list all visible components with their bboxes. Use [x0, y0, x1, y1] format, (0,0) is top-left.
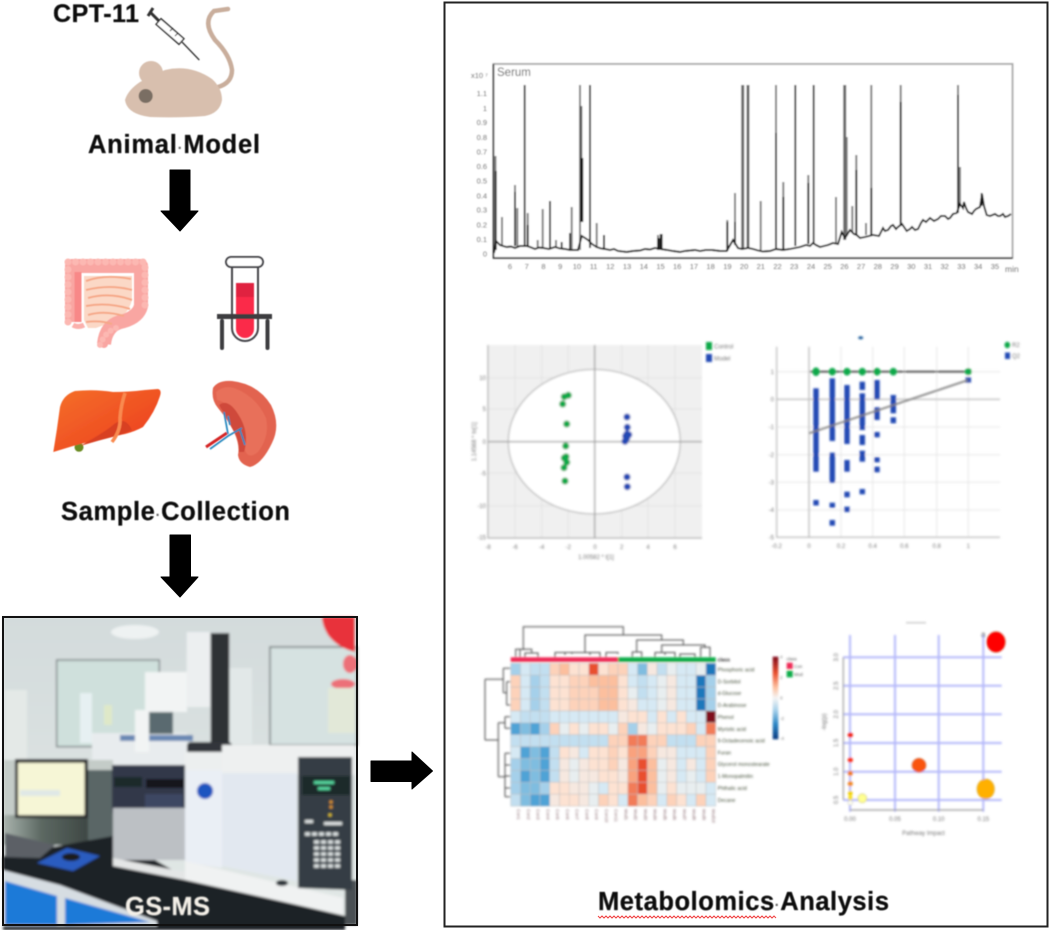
heatmap column labels: Mod3 [643, 809, 648, 821]
chart: pathway bubble plot: 2.0 [834, 709, 840, 718]
chart: permutation test: -1 [769, 425, 775, 431]
chart: serum chromatogram: 15 [656, 262, 665, 271]
chart: PCA score plot: -5 [481, 472, 487, 478]
chart: serum chromatogram: Serum [497, 67, 531, 79]
heatmap row labels: d-Glucose [718, 691, 741, 697]
chart: serum chromatogram: 20 [740, 262, 748, 271]
heatmap row labels: Furan [718, 750, 731, 756]
heatmap row labels: Glycerol monostearate [718, 762, 770, 768]
icon: liver [53, 389, 161, 452]
heatmap column labels: Con8 [584, 809, 589, 820]
heatmap column labels: Mod9 [701, 809, 706, 821]
chart: serum chromatogram: 0.8 [477, 133, 487, 142]
chart: serum chromatogram: 27 [857, 262, 865, 271]
chart: permutation test: Q2 [1012, 354, 1021, 360]
chart: serum chromatogram: 0 [483, 250, 487, 258]
chart: pathway bubble plot: 3.0 [834, 652, 840, 661]
chart: permutation test: -5 [769, 536, 775, 542]
label: CPT-11: CPT-11 [53, 0, 139, 28]
chart: serum chromatogram [471, 64, 1019, 274]
heatmap column labels: Con6 [565, 809, 570, 820]
chart: permutation test: 0 [807, 544, 811, 550]
chart: serum chromatogram: 29 [890, 262, 899, 271]
chart: PCA score plot: -2 [566, 545, 572, 551]
chart: serum chromatogram: 0.4 [477, 192, 487, 200]
heatmap colour scale: 4 [780, 654, 783, 660]
chart: serum chromatogram: 12 [606, 262, 614, 271]
photo frame [3, 617, 357, 925]
chart: permutation test: -4 [769, 508, 775, 514]
chart: PCA score plot: 0 [483, 440, 487, 446]
chart: serum chromatogram: 21 [757, 262, 765, 271]
heading: Metabolomics Analysis: Metabolomics·Analysis [598, 888, 889, 916]
chart: serum chromatogram: 11 [590, 262, 597, 271]
heading: Sample Collection: Sample·Collection [61, 498, 290, 526]
chart: serum chromatogram: 32 [941, 262, 949, 271]
heatmap colour scale: -2 [780, 716, 784, 721]
chart: pathway bubble plot: Pathway Impact [902, 831, 945, 837]
icon: intestine [68, 262, 145, 345]
chart: serum chromatogram: 1.1 [477, 89, 487, 98]
chart: pathway bubble plot: -log(p) [822, 713, 828, 731]
chart: permutation test: 1 [967, 544, 971, 550]
chart: PCA score plot: -10 [477, 504, 487, 510]
left desk area under monitor [3, 760, 113, 840]
chart: serum chromatogram: 25 [824, 262, 832, 271]
chart: serum chromatogram: 16 [673, 262, 681, 271]
arrow: instrument to analysis [371, 752, 432, 789]
heatmap row labels: D-Sorbitol [718, 680, 741, 686]
chart: PCA score plot [472, 342, 733, 561]
chart: serum chromatogram: 30 [907, 262, 915, 271]
heatmap row labels: Myristic acid [718, 727, 746, 733]
chart: permutation test: -3 [769, 480, 775, 486]
chart: serum chromatogram: 23 [790, 262, 798, 271]
heatmap column labels: Mod1 [623, 809, 628, 821]
heatmap row labels: 9-Octadecenoic acid [718, 738, 765, 744]
chart: permutation test: R2 [1012, 343, 1020, 349]
chart: pathway bubble plot [822, 622, 1005, 837]
heading: Animal Model: Animal·Model [88, 131, 260, 159]
chart: serum chromatogram: 8 [541, 262, 545, 271]
chart: PCA score plot: Control [714, 344, 733, 350]
heatmap colour scale: 2 [780, 675, 783, 680]
heatmap row labels: 1-Monopalmitin [718, 774, 753, 780]
heatmap row labels [718, 668, 770, 804]
heatmap column labels: Con10 [604, 809, 609, 823]
heatmap row labels: Phenol [718, 715, 734, 721]
icon: blood test tube [217, 257, 272, 350]
heatmap column labels: Con1 [516, 809, 521, 820]
chart: PCA score plot: 5 [483, 407, 487, 413]
chart: serum chromatogram: 28 [874, 262, 882, 271]
heatmap column labels: Mod10 [711, 809, 716, 823]
chart: metabolite heatmap [485, 627, 803, 823]
chart: serum chromatogram: 19 [723, 262, 732, 271]
heatmap column labels [516, 809, 716, 823]
spell-check squiggle [598, 916, 776, 918]
chart: serum chromatogram: 33 [957, 262, 966, 271]
icon: spleen [206, 381, 276, 467]
heatmap colour scale: Mod [794, 672, 803, 677]
heatmap column labels: Mod7 [682, 809, 687, 821]
chart: pathway bubble plot: 1.5 [834, 738, 840, 747]
heatmap column labels: Con7 [575, 809, 580, 820]
chart: metabolite heatmap: class [718, 658, 730, 664]
heatmap column labels: Mod6 [672, 809, 677, 821]
heatmap colour scale: class [786, 656, 798, 662]
chart: serum chromatogram: 0.3 [477, 206, 487, 214]
chart: serum chromatogram: 0.7 [477, 148, 487, 156]
heatmap colour scale: -4 [780, 736, 784, 741]
chart: serum chromatogram: 14 [640, 262, 648, 271]
chart: serum chromatogram: 0.5 [477, 176, 487, 186]
chart: PCA score plot: 10 [479, 376, 487, 382]
heatmap column labels: Con11 [614, 809, 619, 822]
chart: pathway bubble plot: 0.15 [977, 817, 990, 823]
chart: serum chromatogram: 17 [690, 262, 698, 271]
heatmap cells [511, 663, 716, 806]
heatmap row labels: Decane [718, 798, 735, 804]
heatmap column labels: Con9 [594, 809, 599, 820]
chart: permutation test: 0 [771, 398, 775, 404]
chart: pathway bubble plot: 1.0 [834, 767, 840, 776]
heatmap column labels: Con2 [526, 809, 531, 820]
heatmap column labels: Mod4 [653, 809, 658, 821]
heatmap column labels: Mod8 [692, 809, 697, 821]
chart: serum chromatogram: 0.6 [477, 162, 487, 171]
chart: pathway bubble plot: 0.05 [889, 817, 901, 823]
chart: permutation test: -2 [769, 453, 775, 459]
heatmap column labels: Mod5 [662, 809, 667, 821]
chart: PCA score plot: -4 [539, 545, 545, 551]
chart: serum chromatogram: 0.9 [477, 118, 487, 127]
panel: metabolomics analysis [444, 2, 1048, 926]
chart: PCA score plot: -6 [512, 545, 518, 551]
photo scene [3, 617, 357, 930]
chart: serum chromatogram: 18 [706, 262, 715, 271]
heatmap colour scale: 0 [780, 696, 783, 700]
heatmap column labels: Mod2 [633, 809, 638, 821]
heatmap row labels: Phthalic acid [718, 786, 747, 792]
chart: serum chromatogram: 0.1 [477, 235, 487, 244]
chart: PCA score plot: 0 [593, 545, 597, 551]
chart: PCA score plot: -15 [477, 536, 487, 542]
chart: pathway bubble plot: 0.00 [844, 817, 856, 823]
chart: serum chromatogram: 10 [573, 262, 581, 271]
chart: serum chromatogram: 1 [483, 104, 487, 113]
chart: PCA score plot: 1.00582 * t[1] [578, 555, 614, 561]
chart: permutation test: 0.6 [900, 544, 909, 550]
chart: serum chromatogram: x10 ⁷ [471, 71, 488, 80]
chart: serum chromatogram: 22 [773, 262, 782, 271]
chart: pathway bubble plot: a [981, 630, 986, 639]
chart: serum chromatogram: 34 [974, 262, 982, 271]
chart: permutation test: 0.4 [869, 544, 878, 550]
chart: pathway bubble plot: 2.5 [834, 681, 840, 690]
heatmap column labels: Con3 [536, 809, 540, 820]
chart: permutation test: 0.8 [933, 544, 942, 550]
chart: serum chromatogram: 7 [525, 262, 529, 271]
heatmap colour scale: Con [794, 664, 803, 669]
chart: serum chromatogram: min [1005, 264, 1019, 274]
chart: serum chromatogram: 26 [840, 262, 849, 271]
heatmap row labels: Phosphoric acid [718, 668, 755, 674]
panel: GS-MS instrument photo [3, 617, 357, 930]
arrow: samples to instrument [161, 535, 198, 597]
chart: PCA score plot: Model [714, 356, 730, 362]
heatmap column labels: Con5 [555, 809, 560, 820]
heatmap column labels: Con4 [545, 809, 550, 820]
photo label: GS-MS: GS-MS [125, 893, 210, 921]
chart: pathway bubble plot: 0.5 [834, 795, 840, 804]
chart: serum chromatogram: 9 [558, 262, 562, 271]
chart: PCA score plot: 6 [673, 545, 677, 551]
chart: permutation test [769, 336, 1021, 550]
chart: serum chromatogram: 6 [508, 262, 512, 271]
chart: PCA score plot: 1.14568 * to[1] [472, 422, 478, 461]
heatmap row labels: D-Arabinose [718, 703, 746, 709]
chart: serum chromatogram: 0.2 [477, 220, 487, 230]
chart: serum chromatogram: 35 [991, 262, 999, 271]
chart: permutation test: 0.2 [837, 544, 846, 550]
chart: PCA score plot: -8 [485, 545, 491, 551]
chart: serum chromatogram: 13 [623, 262, 631, 271]
icon: mouse [125, 9, 232, 117]
chart: PCA score plot: 2 [620, 545, 624, 551]
heatmap colour scale [773, 654, 803, 741]
chart: permutation test: -0.2 [772, 544, 783, 550]
chart: serum chromatogram: 24 [807, 262, 815, 271]
chart: permutation test: 1 [771, 370, 775, 376]
panel frame [444, 2, 1048, 926]
chart: PCA score plot: 4 [646, 545, 650, 551]
chart: serum chromatogram: 31 [924, 262, 932, 271]
chart: pathway bubble plot: 0.10 [933, 817, 945, 823]
icon: syringe [148, 8, 199, 60]
arrow: model to samples [161, 170, 198, 231]
